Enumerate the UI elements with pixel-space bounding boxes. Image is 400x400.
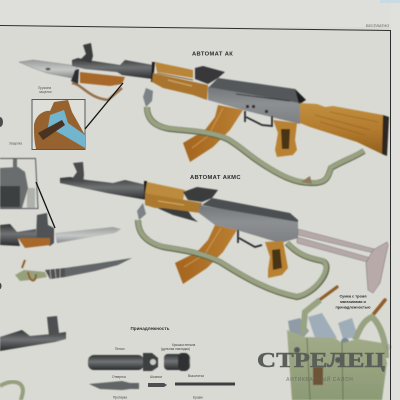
accessory: case	[88, 353, 158, 371]
heading: accessories: Принадлежность	[130, 326, 170, 331]
pouch with magazines	[287, 287, 387, 400]
buttons	[294, 347, 300, 353]
magazines	[288, 318, 309, 337]
barrel clamp	[144, 181, 147, 198]
receiver	[208, 87, 300, 124]
front sight	[80, 43, 93, 63]
cloth straps	[303, 300, 320, 334]
receiver	[199, 205, 298, 243]
rear sight	[183, 187, 218, 202]
receiver cover	[208, 78, 305, 105]
pouch body	[287, 330, 387, 400]
upper handguard	[145, 182, 185, 200]
rifle: АК with bayonet	[19, 43, 389, 162]
barrel and gas tube	[72, 58, 153, 79]
upper handguard	[155, 62, 193, 78]
watermark: АНТИКВАРНЫЙ САЛОН	[286, 375, 353, 383]
folding stock struts	[297, 229, 378, 263]
gun muzzle with knife bayonet	[0, 213, 121, 248]
lower handguard	[152, 73, 208, 100]
barrel clamp	[151, 62, 155, 82]
heading: АК: АВТОМАТ АК	[192, 52, 233, 58]
accessory: case cap	[164, 353, 190, 371]
rear sight block	[195, 66, 225, 84]
watermark: СТРЕЛЕЦ	[257, 348, 385, 372]
grip	[265, 241, 288, 278]
label: screwdriver: Отвертка	[112, 375, 126, 379]
corner note: БЕСПЛАТНО	[366, 24, 389, 28]
sling fragment	[0, 382, 23, 400]
label: punch: Выколотка	[188, 374, 204, 378]
blue part	[48, 110, 85, 148]
label: pouch: магазинами и	[340, 300, 367, 304]
inset leader line	[85, 83, 123, 129]
receiver cover	[202, 198, 298, 225]
rear trunnion	[295, 89, 306, 104]
left crop fragment	[0, 117, 3, 127]
trigger guard	[245, 111, 272, 126]
label: latch: Защелка	[9, 142, 22, 146]
bayonet blade	[19, 60, 77, 78]
butt plate	[382, 115, 389, 156]
sling: АК	[143, 88, 364, 184]
inset leader line 2	[36, 182, 55, 228]
stock	[300, 103, 383, 154]
label: cap	[161, 343, 195, 351]
label: cap: Крышка пенала	[172, 343, 195, 347]
label: spring: Пружина	[38, 86, 51, 90]
label: pouch: принадлежностью	[336, 306, 371, 310]
label: rod: Шомпол	[150, 375, 162, 379]
inset: bayonet latch	[32, 100, 85, 150]
trigger guard	[238, 230, 262, 247]
magazine	[183, 105, 243, 162]
fragment at left edge	[0, 283, 2, 289]
bayonet handle	[80, 72, 125, 86]
accessory: screwdriver	[89, 381, 139, 390]
inset: gas block detail	[0, 158, 38, 208]
label: pouch: Сумка с тремя	[339, 294, 367, 298]
watermark	[257, 343, 392, 383]
accessory: punch	[175, 382, 235, 386]
label: wiper: Протирка	[113, 396, 127, 400]
sling: АКМС	[137, 203, 327, 297]
lower handguard	[145, 193, 202, 213]
label: brush: Ершик	[193, 396, 203, 400]
rifle: bottom left fragment	[0, 316, 66, 351]
pins	[246, 105, 268, 113]
heading: АКМС: АВТОМАТ АКМС	[190, 175, 241, 181]
pistol grip	[273, 120, 297, 157]
butt plate	[366, 242, 388, 293]
label: pouch	[336, 294, 371, 310]
accessory: rod	[148, 383, 167, 387]
magazine	[175, 225, 237, 284]
bayonet strap	[72, 83, 122, 100]
rifle: АКМС	[60, 162, 388, 293]
scabbard	[15, 258, 132, 281]
muzzle and barrel	[60, 177, 147, 200]
label: cap: (дульная накладка)	[161, 347, 190, 351]
front sight	[72, 162, 84, 183]
label: case: Пенал	[115, 347, 125, 351]
cutaway section	[34, 100, 85, 149]
leather straps	[318, 287, 337, 301]
label: spring: защелки	[39, 90, 52, 94]
watermark: ®	[386, 343, 392, 352]
lower band	[155, 207, 198, 222]
label: spring	[38, 86, 52, 94]
